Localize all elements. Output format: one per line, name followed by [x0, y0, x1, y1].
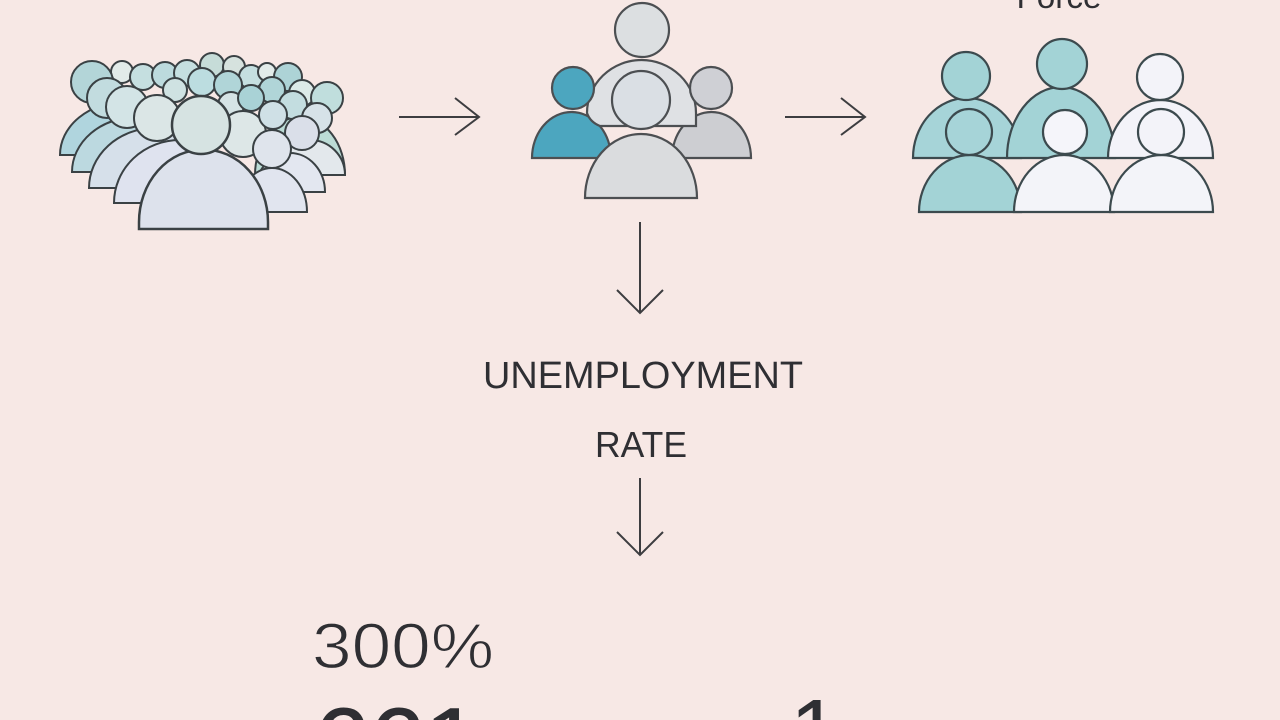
back person: [587, 3, 696, 126]
arrow: crowd to group: [399, 98, 479, 135]
back centre person: [1007, 39, 1115, 158]
arrow: unemployment rate down to figures: [617, 478, 663, 555]
right grey person body: [672, 112, 751, 158]
heading: unemployment rate: RATE: [595, 424, 687, 465]
front centre person: [1014, 110, 1114, 212]
heading: unemployment rate: UNEMPLOYMENT: [483, 355, 803, 397]
heading: unemployment rate: [483, 355, 803, 465]
back right person: [1108, 54, 1213, 158]
left teal person head: [552, 67, 594, 109]
left teal person body: [532, 112, 611, 158]
front left person: [919, 109, 1021, 212]
icon: general population crowd: [60, 53, 345, 229]
right grey person head: [690, 67, 732, 109]
front right person: [1110, 109, 1213, 212]
arrow: group to labor force: [785, 98, 865, 135]
front person: [139, 96, 268, 229]
icon: labor force: [913, 39, 1213, 212]
back left person: [913, 52, 1021, 158]
figure: 300%: 300%: [312, 610, 494, 682]
front person: [585, 71, 697, 198]
arrow: group down to unemployment rate: [617, 222, 663, 313]
icon: working-age group: [532, 3, 751, 198]
